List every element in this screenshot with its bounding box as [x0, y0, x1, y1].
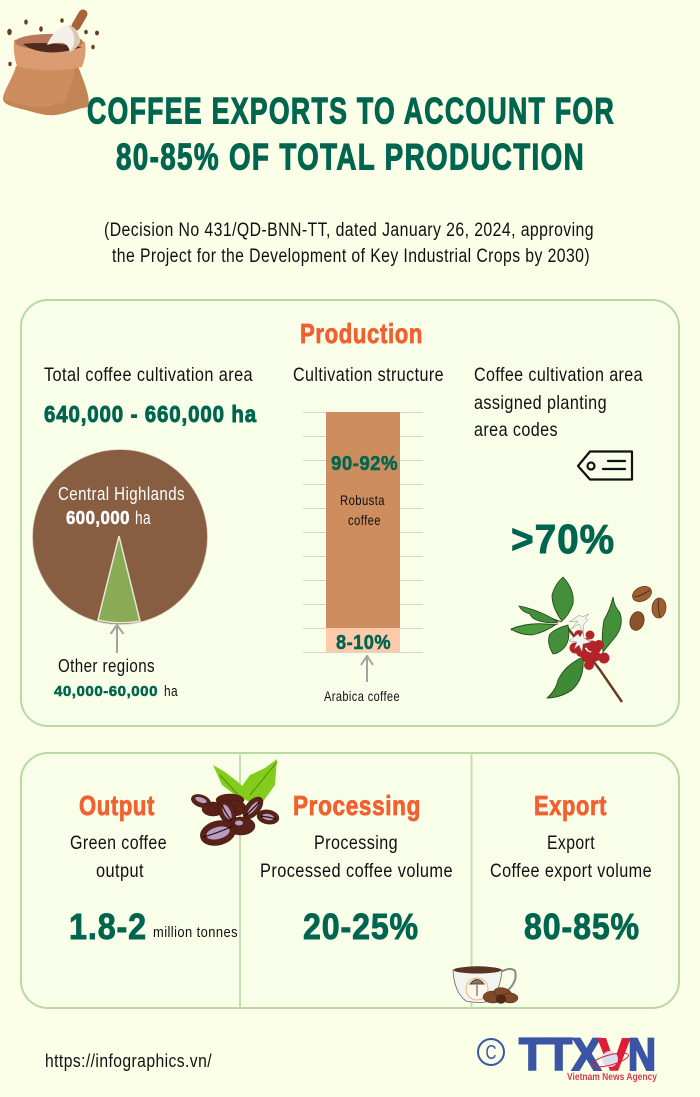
logo: TTXVN Vietnam News Agency: TTX — [519, 1029, 601, 1080]
text: planting area codes label: assigned planting — [474, 392, 607, 414]
text: green coffee output — [70, 832, 167, 882]
bar chart: cultivation structure: coffee — [348, 512, 381, 528]
logo: copyright symbol — [478, 1039, 504, 1065]
number: output: million tonnes — [153, 924, 238, 941]
arrow: arabica coffee — [361, 656, 373, 682]
label: arabica coffee: Arabica coffee — [324, 688, 400, 704]
pie chart: cultivation area by region — [32, 450, 208, 624]
bar chart: cultivation structure: 8-10% — [336, 632, 391, 654]
number: share with planting area codes: >70% — [511, 516, 615, 562]
title — [87, 90, 615, 178]
illustration: coffee branch with beans — [511, 577, 667, 702]
icon: tag — [578, 452, 632, 480]
logo: TTXVN Vietnam News Agency: V — [598, 1029, 630, 1080]
text: coffee export volume: Coffee export volume — [490, 860, 652, 882]
bar chart: cultivation structure — [303, 412, 423, 654]
number: output: 1.8-2 — [69, 906, 147, 947]
footer: website: https://infographics.vn/ — [45, 1050, 212, 1071]
icon: coffee beans with leaves — [190, 759, 280, 849]
subtitle: decision reference: the Project for the Development of Key Industrial Crops by 2030) — [112, 246, 590, 267]
text: green coffee output: output — [96, 860, 144, 882]
heading: output: Output — [79, 790, 155, 821]
pie chart: cultivation area by region: Central Highlands — [58, 484, 185, 504]
logo: TTXVN Vietnam News Agency — [519, 1029, 657, 1083]
text: processed coffee volume: Processing — [314, 832, 398, 854]
bar chart: cultivation structure: 90-92% — [331, 453, 398, 475]
number: output — [69, 906, 238, 947]
text: coffee export volume — [490, 832, 652, 882]
icon: coffee sack with scoop — [3, 14, 99, 115]
heading: processing: Processing — [293, 790, 421, 821]
text: planting area codes label — [474, 364, 643, 441]
number: export: 80-85% — [524, 906, 640, 947]
bar chart: cultivation structure: Robusta — [340, 492, 385, 508]
text: coffee export volume: Export — [547, 832, 595, 854]
label: other regions: ha — [164, 683, 178, 700]
text: planting area codes label: area codes — [474, 419, 558, 441]
number: processing: 20-25% — [303, 906, 419, 947]
logo: TTXVN Vietnam News Agency: N — [628, 1029, 656, 1080]
label: other regions — [54, 656, 178, 700]
pie chart: cultivation area by region: ha — [135, 508, 151, 528]
text: total cultivation area label: Total coffee cultivation area — [44, 364, 253, 386]
panel: production — [21, 300, 679, 726]
text: processed coffee volume — [260, 832, 453, 882]
text: processed coffee volume: Processed coffee volume — [260, 860, 453, 882]
logo: copyright symbol: C — [486, 1042, 496, 1064]
text: planting area codes label: Coffee cultivation area — [474, 364, 643, 386]
subtitle: decision reference — [104, 220, 594, 267]
label: other regions: 40,000-60,000 — [54, 683, 158, 700]
arrow: other regions — [110, 625, 124, 653]
logo: TTXVN Vietnam News Agency: Vietnam News Agency — [567, 1072, 657, 1083]
number: total cultivation area: 640,000 - 660,000 ha — [44, 401, 257, 427]
pie chart: cultivation area by region: 600,000 — [66, 508, 130, 528]
panel: output, processing, export — [21, 753, 679, 1008]
subtitle: decision reference: (Decision No 431/QD-BNN-TT, dated January 26, 2024, approving — [104, 220, 594, 241]
icon: coffee cup with beans — [453, 966, 518, 1004]
text: cultivation structure label: Cultivation structure — [293, 364, 444, 386]
text: green coffee output: Green coffee — [70, 832, 167, 854]
label: other regions: Other regions — [58, 656, 155, 676]
heading: production: Production — [300, 318, 423, 349]
heading: export: Export — [534, 790, 607, 821]
